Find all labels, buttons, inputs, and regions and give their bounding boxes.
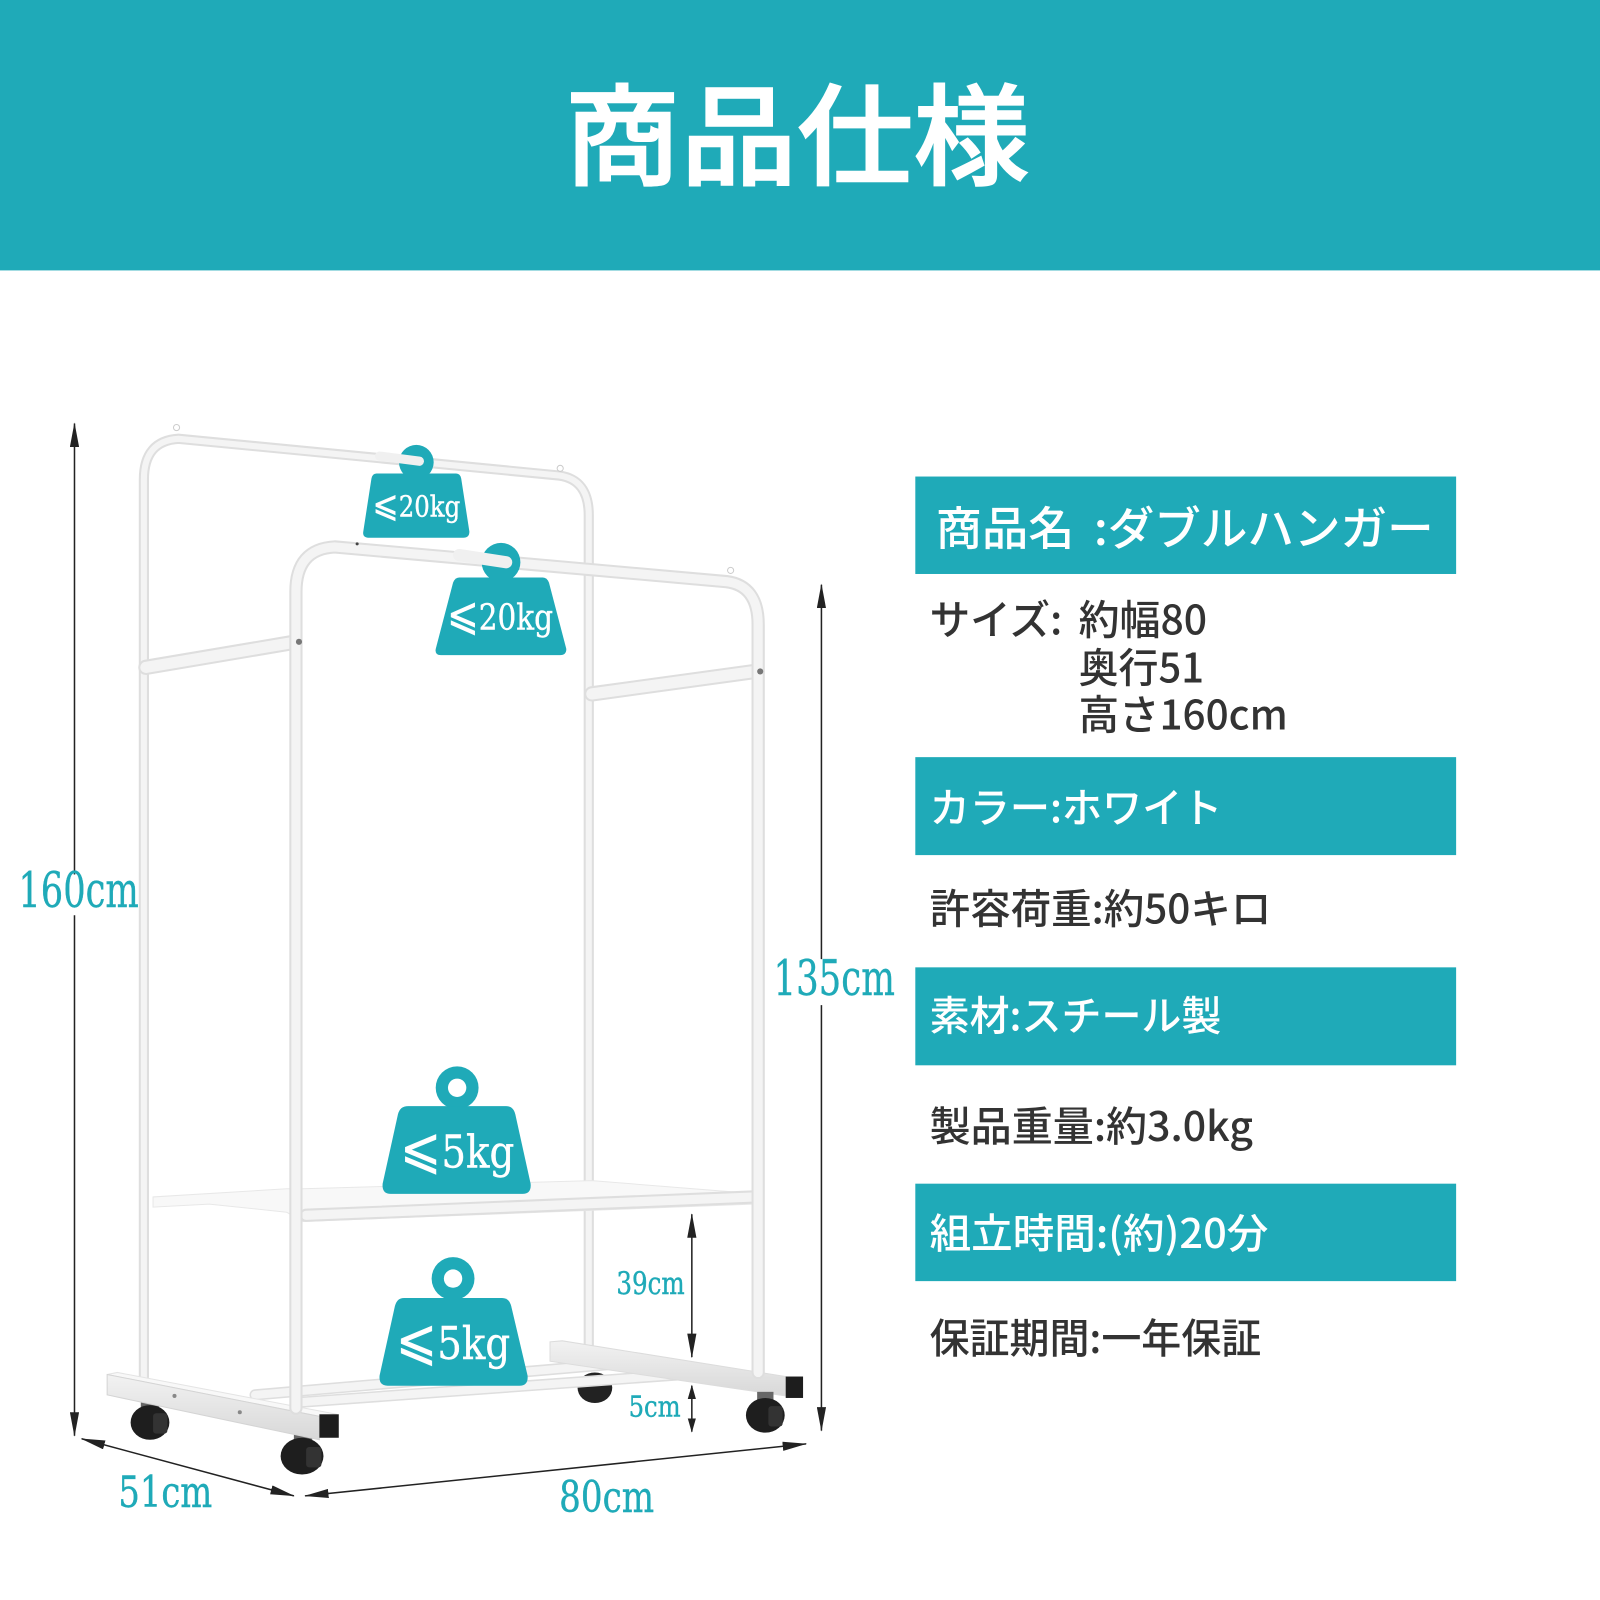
spec: warranty: 保証期間:一年保証 bbox=[930, 1306, 1261, 1365]
product illustration: clothes rack bbox=[107, 424, 803, 1474]
rear caster bbox=[578, 1372, 612, 1403]
dimension: depth 51cm: 51cm bbox=[118, 1468, 212, 1518]
header banner bbox=[0, 0, 1600, 270]
back frame bbox=[144, 424, 589, 1378]
weight tag: base 5kg bbox=[379, 1257, 528, 1386]
spec: size: サイズ: bbox=[930, 588, 1062, 647]
spec: assembly time bar: 組立時間:(約)20分 bbox=[930, 1201, 1269, 1260]
label: ⩽5kg bbox=[400, 1115, 514, 1181]
title: 商品仕様 bbox=[564, 49, 1030, 209]
spec: colour bar: カラー:ホワイト bbox=[930, 775, 1222, 834]
dimension: height 160cm: 160cm bbox=[18, 862, 139, 919]
dimension: height 135cm: 135cm bbox=[773, 950, 895, 1007]
spec: size bbox=[930, 588, 1288, 742]
weight tag: top rail 20kg bbox=[363, 445, 469, 538]
right base beam bbox=[550, 1341, 803, 1398]
spec: material bar bbox=[915, 967, 1456, 1065]
left base beam bbox=[107, 1372, 339, 1440]
weight tag: shelf 5kg bbox=[383, 1066, 531, 1194]
spec: product name bar: 商品名 bbox=[936, 493, 1074, 559]
dimension: width 80cm: 80cm bbox=[559, 1473, 654, 1523]
shelf bbox=[153, 1181, 757, 1221]
dimension: width 80cm bbox=[305, 1444, 806, 1523]
label: ⩽5kg bbox=[396, 1307, 510, 1373]
label: ⩽20kg bbox=[372, 482, 460, 525]
spec: assembly time bar bbox=[915, 1184, 1456, 1281]
dimension: 5cm clearance: 5cm bbox=[629, 1389, 681, 1423]
spec: product name bar: :ダブルハンガー bbox=[1094, 493, 1434, 559]
side rails bbox=[146, 643, 755, 694]
label: ⩽20kg bbox=[447, 587, 553, 641]
spec: load capacity: 許容荷重:約50キロ bbox=[930, 876, 1271, 935]
base crossbars bbox=[255, 1363, 697, 1402]
spec: size: 約幅80 bbox=[1079, 588, 1207, 647]
spec: product weight: 製品重量:約3.0kg bbox=[930, 1094, 1253, 1153]
spec: product name bar bbox=[915, 477, 1456, 574]
spec: colour bar bbox=[915, 757, 1456, 855]
dimension: 39cm clearance: 39cm bbox=[616, 1267, 685, 1302]
spec: size: 奥行51 bbox=[1079, 636, 1204, 695]
spec: material bar: 素材:スチール製 bbox=[930, 984, 1221, 1043]
spec: size: 高さ160cm bbox=[1079, 683, 1288, 742]
weight tag: front rail 20kg bbox=[436, 543, 566, 655]
dimension: depth 51cm bbox=[82, 1439, 294, 1518]
front frame bbox=[296, 542, 763, 1408]
casters bbox=[131, 1392, 785, 1474]
